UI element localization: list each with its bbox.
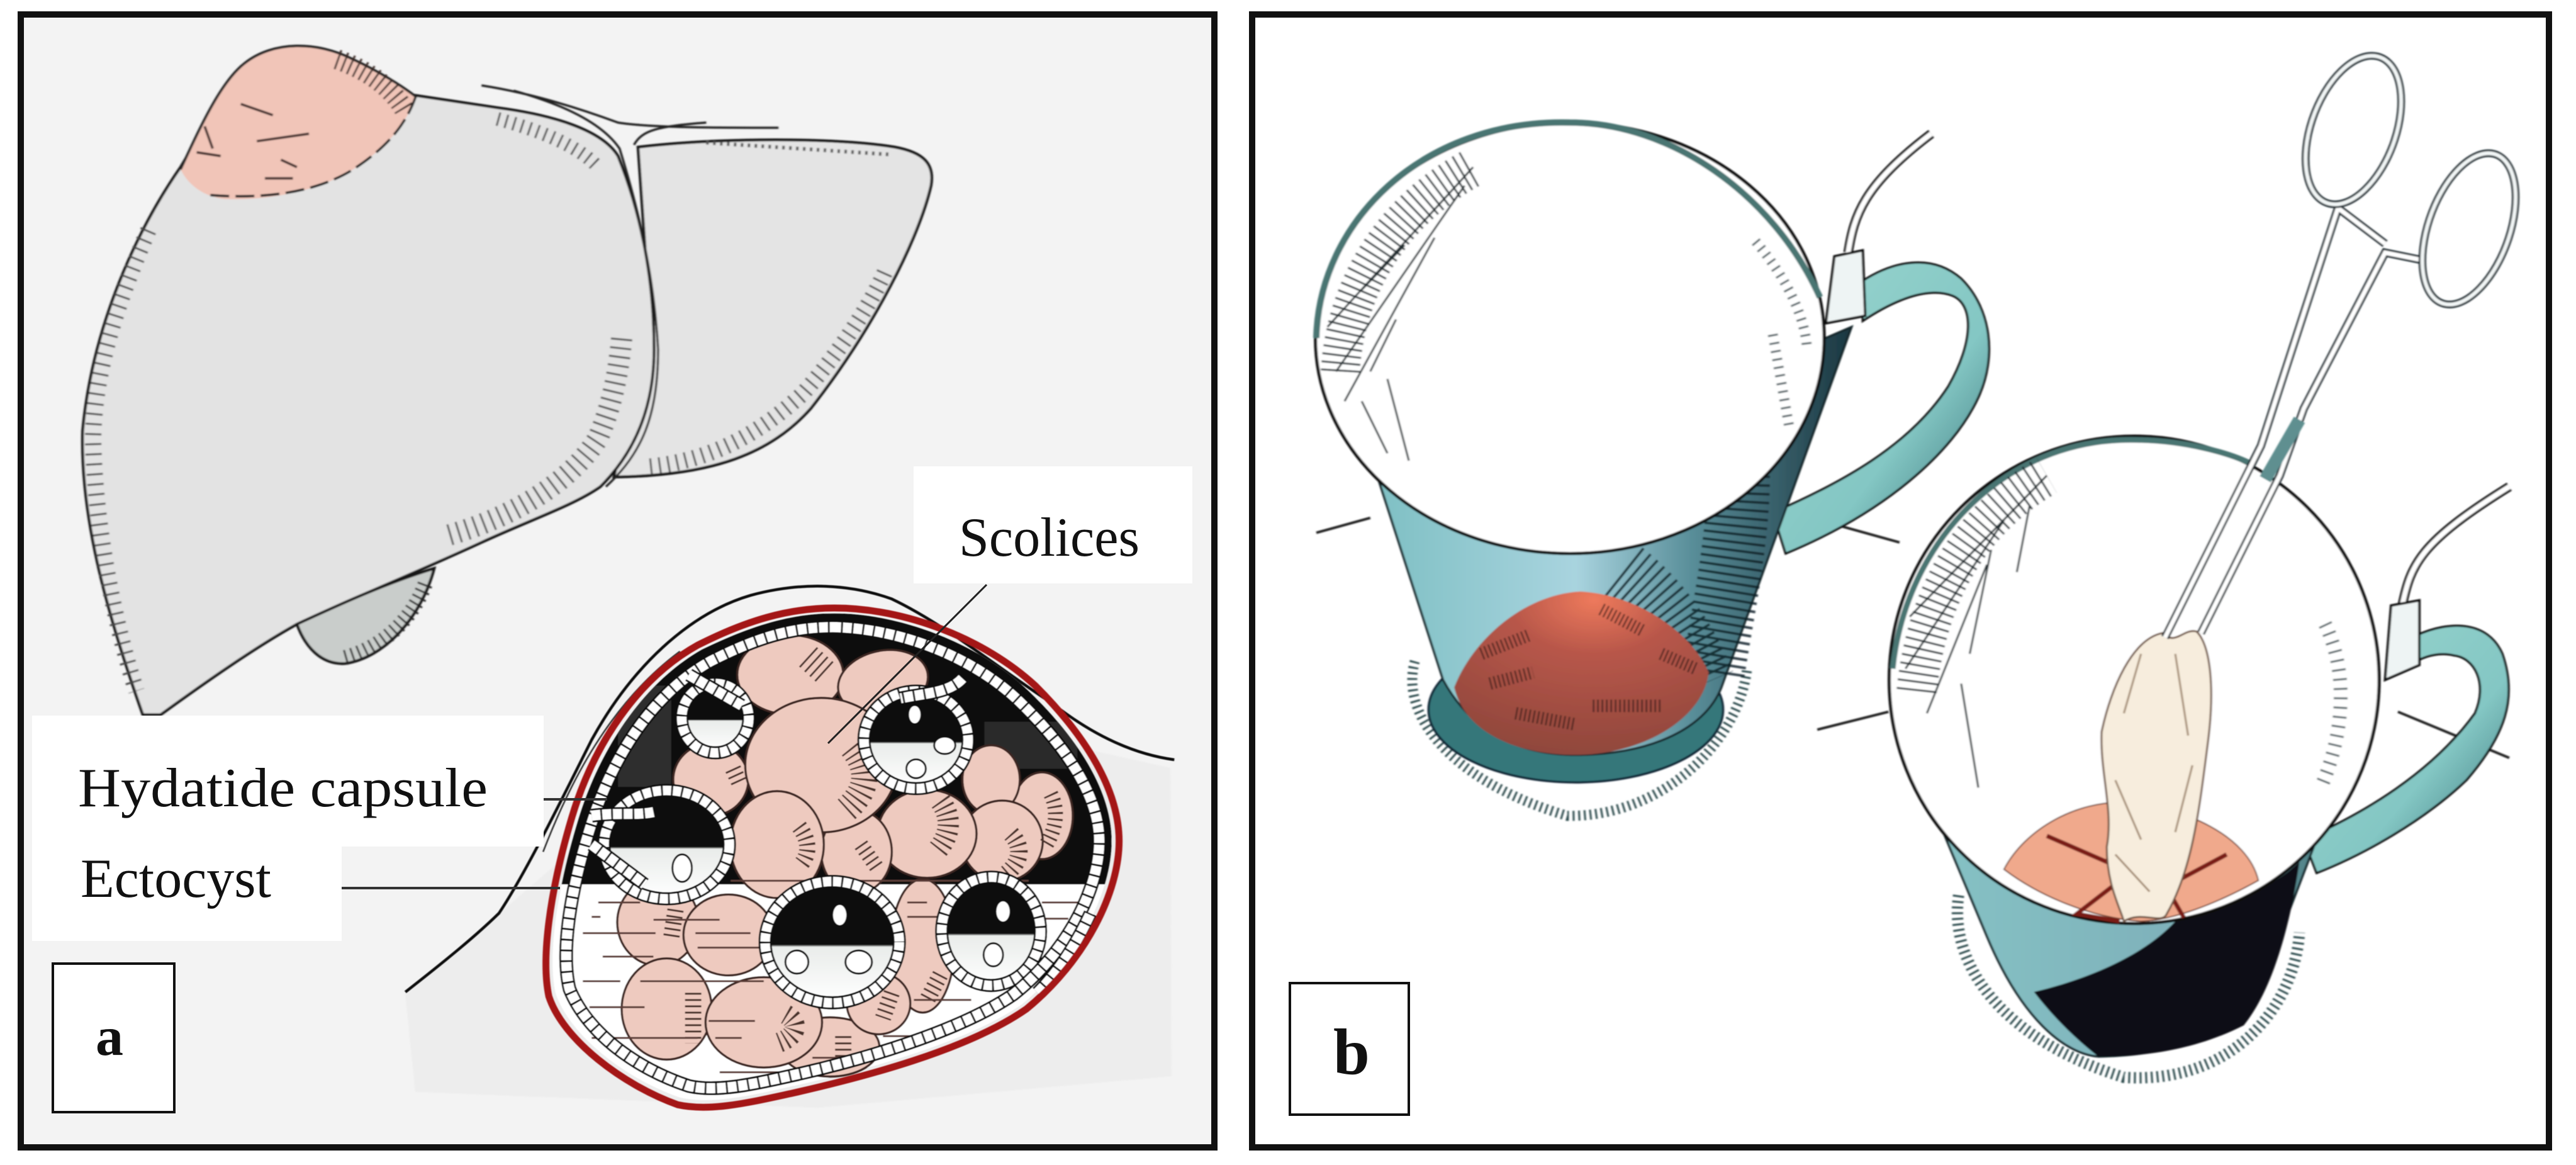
cup 2 drain tube [2402, 487, 2509, 605]
cup 2 hatching [1917, 476, 2047, 691]
cup 1 body shading [1623, 476, 1739, 684]
gallbladder [297, 568, 434, 663]
daughter cysts [617, 635, 1073, 1076]
cyst cavity [552, 614, 1112, 1100]
panel b: surgical cups [1252, 14, 2549, 1147]
panel b frame [1252, 14, 2549, 1147]
forceps blades and shanks [2165, 208, 2422, 638]
red ectocyst wall [546, 608, 1119, 1107]
brood capsule 1 [681, 684, 749, 753]
cyst hatching [671, 657, 1056, 1061]
label: Scolices: Scolices [959, 507, 1140, 568]
cup 2 rim and interior [1890, 436, 2379, 923]
capsule cracks [2047, 832, 2227, 921]
forceps [2165, 46, 2533, 638]
lower background patch [405, 718, 1172, 1108]
liver illustration [82, 46, 932, 715]
abdominal skin line [405, 586, 1174, 992]
gauze swab [2102, 631, 2211, 921]
label background: Scolices [914, 466, 1192, 583]
brood capsule 5 [942, 877, 1041, 986]
panel letter box a: a [96, 1006, 123, 1067]
cup 1 dotted suture ring [1412, 661, 1747, 816]
dark fluid upper half [561, 613, 1112, 885]
cup 1 rim and interior [1316, 123, 1824, 553]
leader line: Scolices [828, 585, 987, 743]
cup 2 surface ticks [1817, 712, 2509, 758]
cup 1 base [1428, 637, 1723, 782]
fluid level lines [583, 881, 1082, 1072]
forceps ring 2 [2405, 144, 2533, 313]
right lobe [82, 67, 654, 715]
cup 2 opened capsule [2004, 802, 2258, 921]
lower cysts [891, 879, 955, 1013]
cups illustration [1316, 46, 2533, 1078]
panel letter box a [53, 964, 174, 1112]
leader line: Hydatide capsule [544, 798, 607, 801]
panel letter box b [1290, 983, 1409, 1115]
label: Hydatide capsule: Hydatide capsule [78, 758, 488, 819]
falciform ligament [481, 86, 778, 487]
cup 2 tube clamp [2385, 600, 2419, 680]
capsule stalks joining the wall [591, 675, 1090, 993]
cup 2 black shadow [2034, 862, 2299, 1057]
cup 1 interior hatching [1340, 167, 1473, 371]
cup 1 body [1377, 327, 1852, 755]
cup 1 tube clamp [1826, 250, 1865, 324]
cup 2 body [1918, 684, 2377, 1057]
panel a: liver and cyst section [21, 14, 1214, 1147]
forceps joint [2265, 420, 2299, 479]
cup 1 red capsule [1454, 592, 1708, 755]
forceps ring 1 [2288, 46, 2419, 214]
brood capsule 2 [864, 691, 968, 789]
germinal cell layer [566, 627, 1099, 1088]
label background: Ectocyst [32, 843, 342, 941]
left lobe [614, 140, 932, 477]
cup 2 handle [2304, 626, 2509, 873]
cup 1 [1316, 123, 1989, 816]
cup 1 surface ticks [1316, 518, 1900, 543]
brood capsule 3 [604, 791, 729, 899]
panel a frame [21, 14, 1214, 1147]
cup 1 drain tube [1848, 133, 1931, 252]
label: Ectocyst: Ectocyst [81, 848, 271, 909]
lobe hatching [93, 230, 148, 691]
label background: Hydatide capsule [32, 716, 544, 847]
panel letter box b: b [1333, 1016, 1370, 1088]
cup 1 handle [1772, 262, 1989, 553]
upper cysts [737, 635, 843, 714]
leader line: Ectocyst [342, 887, 560, 889]
brood capsules [604, 684, 1041, 1003]
brood capsule 4 [765, 882, 899, 1003]
pink cyst dome [181, 46, 416, 200]
cup 2 dotted suture ring [1957, 896, 2299, 1078]
cyst cross-section [405, 586, 1174, 1107]
cup 2 [1817, 46, 2533, 1078]
